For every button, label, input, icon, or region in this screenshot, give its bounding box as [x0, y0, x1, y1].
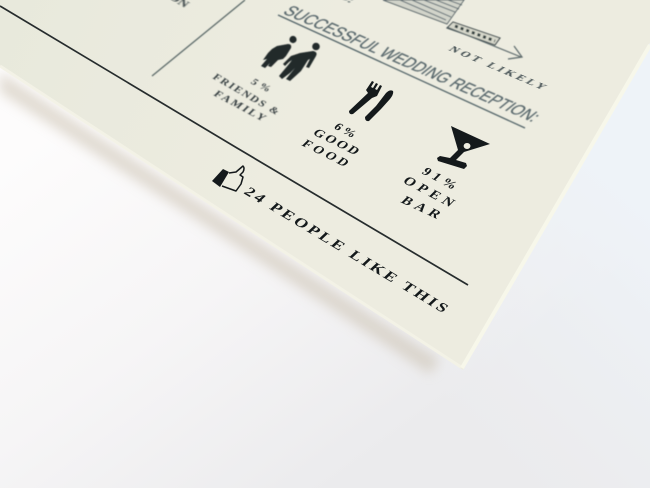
- icon: couple: [261, 36, 320, 81]
- knife: [365, 90, 393, 121]
- text: 6% good food: 6%: [331, 121, 360, 140]
- cuff: [212, 169, 229, 187]
- card shadow: [0, 72, 440, 374]
- text: 91% open bar: BAR: [397, 195, 445, 222]
- man: [279, 43, 320, 81]
- text: 5% friends & family: FAMILY: [211, 89, 268, 123]
- hatched bar: [383, 0, 464, 24]
- vertical divider: [152, 0, 245, 76]
- text: 5% friends & family: 5%: [248, 78, 273, 94]
- heading: successful wedding reception: SUCCESSFUL WEDDING RECEPTION:: [278, 3, 545, 125]
- main horizontal rule: [0, 6, 468, 285]
- woman: [261, 36, 297, 68]
- text: 5% friends & family: FRIENDS &: [210, 73, 282, 117]
- text: 6% good food: GOOD: [310, 126, 363, 157]
- dotted bar: [447, 22, 500, 45]
- icon: martini glass: [437, 126, 490, 169]
- icon: fork and knife: [349, 81, 393, 121]
- text: 91% open bar: [397, 165, 461, 222]
- text: 6% good food: FOOD: [299, 137, 353, 169]
- card: [0, 0, 650, 370]
- arrow: [447, 27, 522, 59]
- text: 24 people like this: 24 PEOPLE LIKE THIS: [240, 185, 452, 316]
- chart fragment: likelihood bars: [383, 0, 522, 59]
- text: 91% open bar: OPEN: [399, 175, 457, 210]
- text: 6% good food: [299, 121, 363, 169]
- text: 91% open bar: 91%: [419, 165, 461, 192]
- label: not likely: NOT LIKELY: [446, 45, 549, 91]
- heading: successful wedding reception: [278, 3, 545, 128]
- icon: thumbs up: [212, 166, 244, 191]
- hand outline: [222, 166, 244, 191]
- fork: [349, 81, 382, 114]
